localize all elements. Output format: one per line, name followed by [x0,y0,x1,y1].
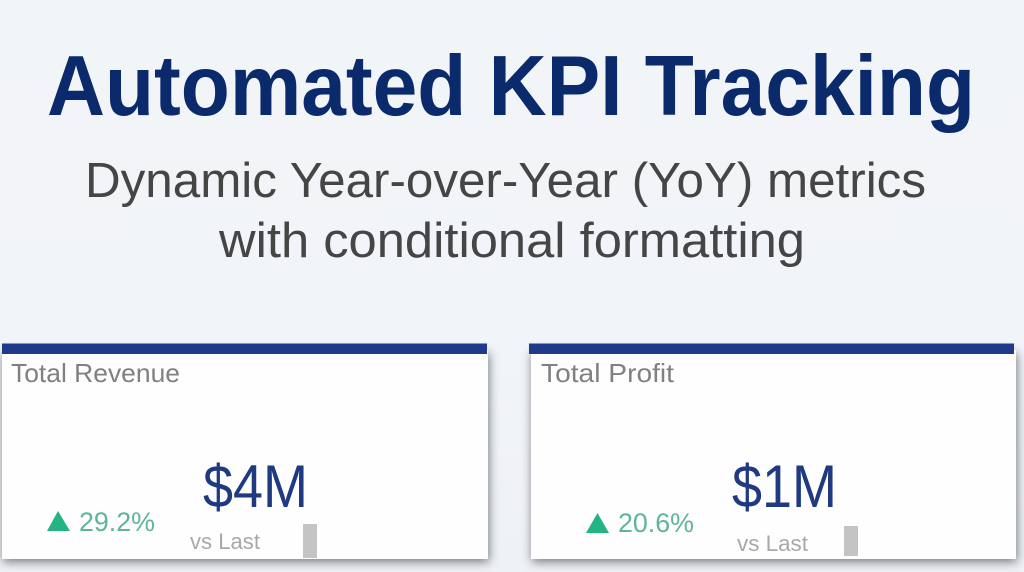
subtitle: with conditional formatting [218,214,805,268]
card heading: Total Profit [541,358,675,388]
title: Automated KPI Tracking [47,39,975,134]
grey marker bar [844,526,858,556]
icon: up triangle [47,511,70,531]
panel: total profit KPI card [529,344,1016,559]
card accent bar [2,344,487,354]
subtitle [85,154,926,268]
comparison label: vs Last [737,531,808,556]
grey marker bar [303,524,317,558]
card background [2,350,488,559]
card background [531,350,1016,559]
comparison label: vs Last [190,529,260,554]
subtitle: Dynamic Year-over-Year (YoY) metrics [85,154,926,208]
metric value: $1M [732,453,837,520]
metric value: $4M [203,453,308,520]
change percentage: 29.2% [79,507,155,537]
change percentage: 20.6% [618,508,694,538]
icon: up triangle [586,513,609,533]
panel: total revenue KPI card [2,344,488,559]
card accent bar [529,344,1014,354]
card heading: Total Revenue [11,358,180,388]
